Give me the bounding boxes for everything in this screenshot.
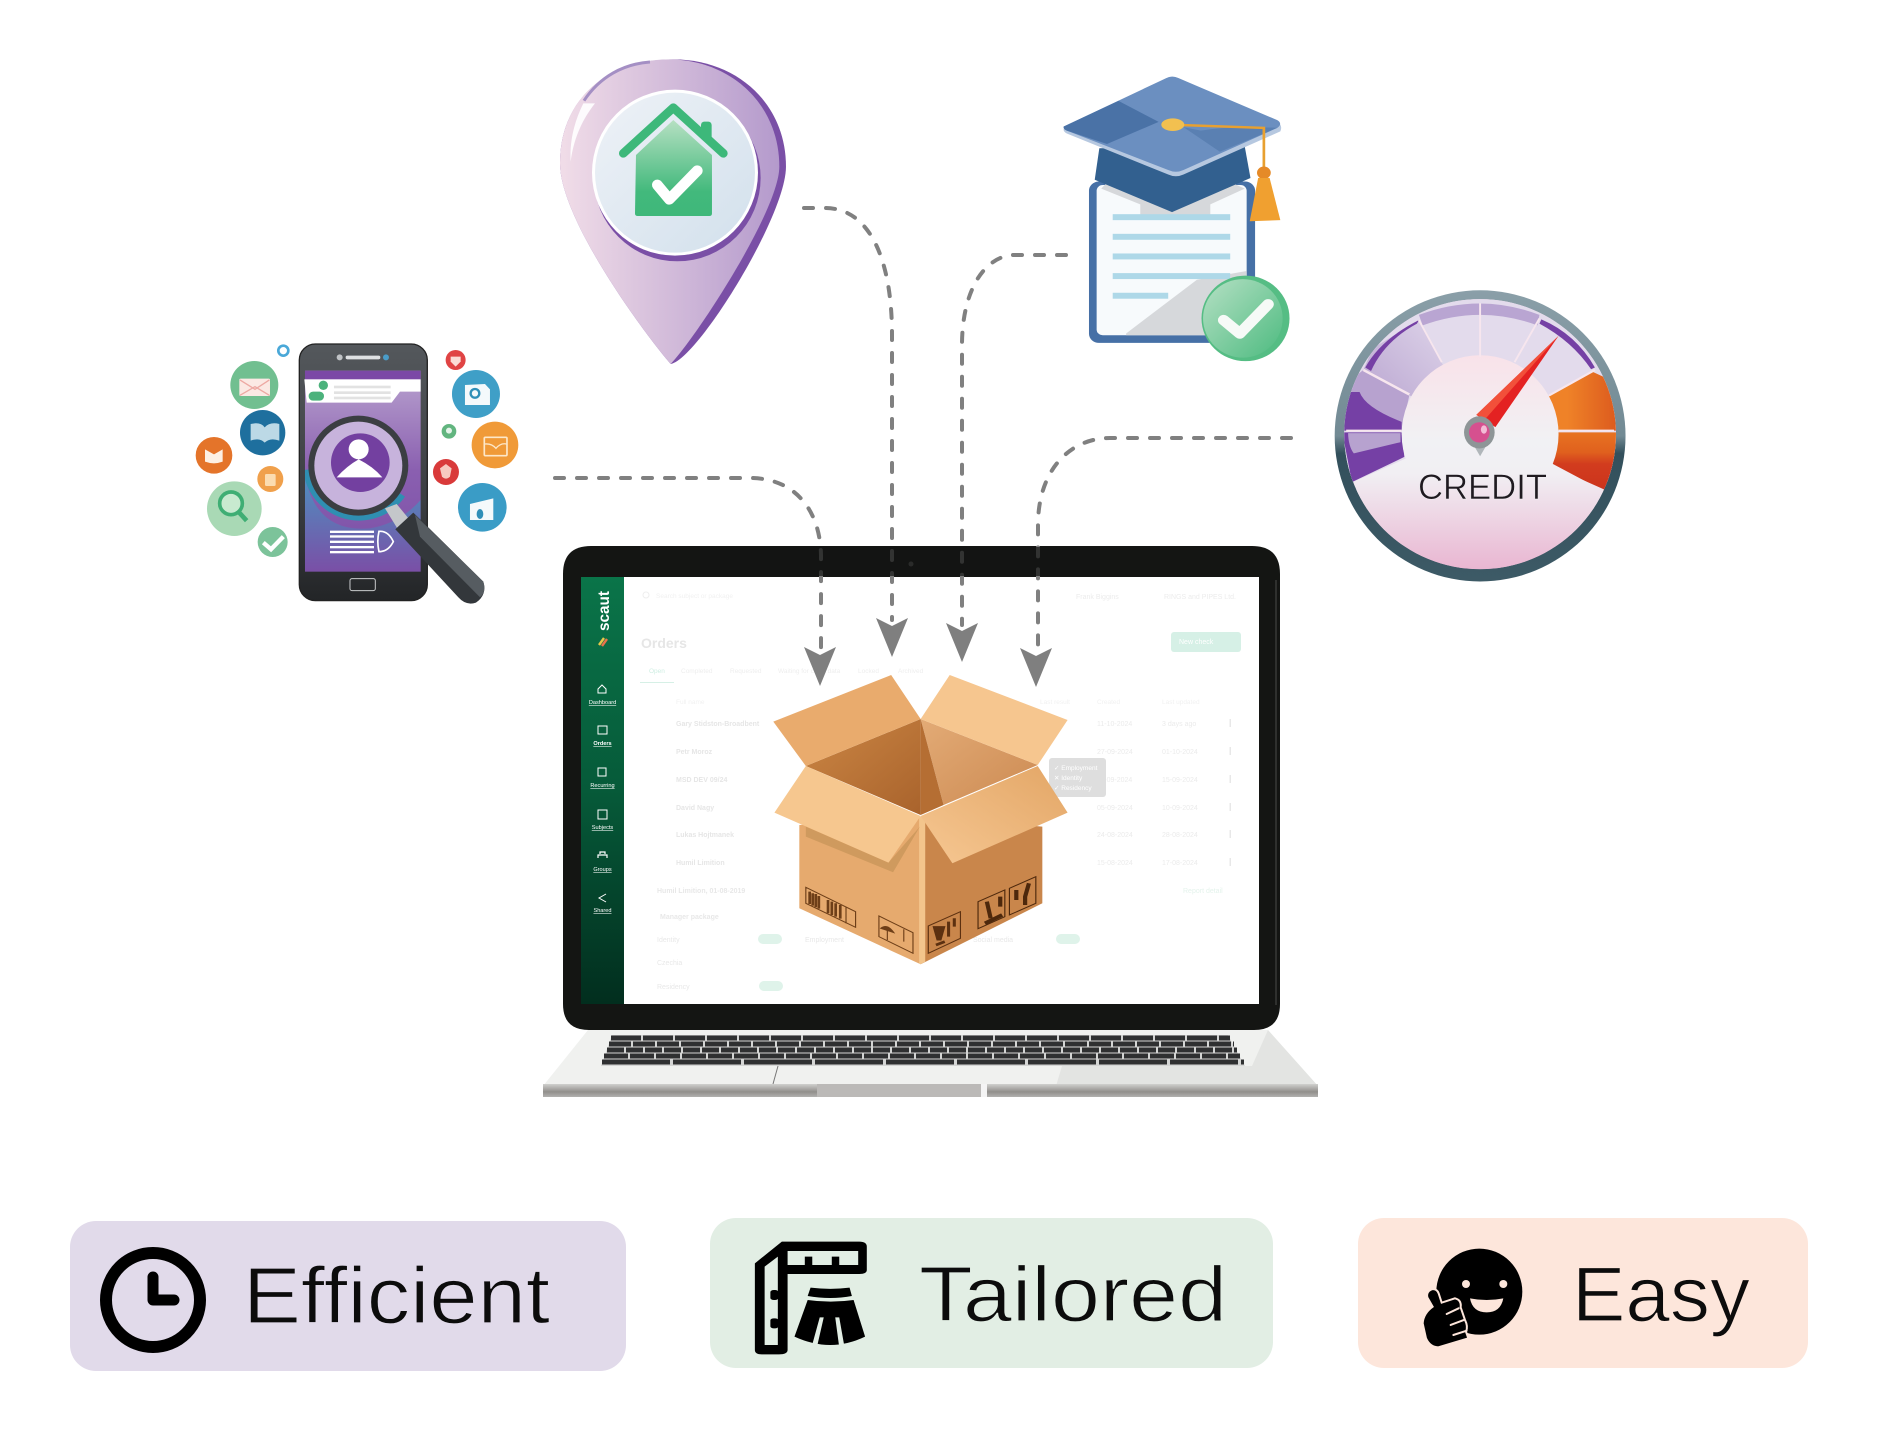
gauge sectors bbox=[1344, 299, 1616, 570]
box interior bbox=[806, 719, 1038, 815]
house check bbox=[657, 171, 697, 199]
tooltip: ✕ Identity bbox=[1054, 775, 1083, 782]
phone with app icons bbox=[196, 344, 518, 604]
paper fold grey bbox=[1101, 183, 1247, 335]
search field: Search subject or package bbox=[656, 593, 733, 600]
nav: groups bbox=[593, 852, 612, 873]
tab underline bbox=[640, 682, 674, 683]
house body bbox=[635, 120, 712, 216]
smiley face bbox=[1436, 1249, 1522, 1335]
gauge pivot bbox=[1464, 416, 1495, 456]
date columns: 11-09-2024 bbox=[1097, 777, 1132, 784]
row details: Employment bbox=[805, 937, 844, 944]
row details: Humil Limition, 01-08-2019 bbox=[657, 888, 745, 895]
date columns: 05-09-2024 bbox=[1097, 805, 1133, 812]
gauge needle bbox=[1476, 336, 1559, 427]
row menus bbox=[1230, 719, 1231, 866]
pin body bbox=[560, 59, 779, 364]
dashed arrows into box bbox=[555, 208, 1291, 687]
faded orders table on screen bbox=[640, 592, 1241, 991]
finger gaps bbox=[1447, 1308, 1467, 1335]
upper left purple fill bbox=[1342, 392, 1402, 431]
handling label: glass bbox=[928, 912, 960, 953]
laptop lid bbox=[563, 546, 1280, 1030]
status tabs: Requested bbox=[730, 668, 762, 675]
house roof bbox=[623, 108, 723, 153]
handling label: arrows bbox=[978, 890, 1005, 929]
date columns: 28-08-2024 bbox=[1162, 832, 1198, 839]
table header: Last updated bbox=[1162, 699, 1200, 706]
ruler notches bbox=[770, 1290, 778, 1328]
top bar account text: Frank Biggins bbox=[1076, 594, 1119, 601]
trackpad edge bbox=[773, 1066, 778, 1084]
camera bbox=[908, 562, 914, 566]
date columns: 27-09-2024 bbox=[1097, 749, 1133, 756]
chip: efficient bbox=[70, 1221, 626, 1371]
front left flap bbox=[774, 766, 921, 863]
app icon: small blue ring bbox=[278, 346, 288, 356]
table rows bbox=[676, 721, 760, 867]
app icon: blue camera bbox=[452, 370, 500, 418]
app sidebar bbox=[581, 577, 624, 1004]
bezel dim overlay for arrows bbox=[700, 547, 1100, 576]
nav: dashboard: Dashboard bbox=[589, 700, 616, 706]
date columns: 11-10-2024 bbox=[1097, 721, 1132, 728]
smiley features bbox=[1462, 1280, 1507, 1312]
gauge face bbox=[1344, 299, 1616, 569]
red sector bbox=[1552, 432, 1616, 491]
nav: groups: Groups bbox=[593, 867, 612, 873]
nav: shared bbox=[593, 894, 612, 914]
scaut logo: scaut bbox=[596, 590, 613, 631]
table header: Full name bbox=[676, 699, 705, 706]
handling label: umbrella bbox=[879, 916, 913, 953]
nav: shared: Shared bbox=[593, 908, 612, 914]
laptop screen bbox=[581, 577, 1259, 1004]
chip background bbox=[1358, 1218, 1808, 1368]
nav: subjects: Subjects bbox=[592, 825, 613, 831]
app icon: blue book bbox=[240, 410, 285, 455]
back flaps bbox=[773, 675, 1068, 766]
pin shadow edge bbox=[560, 59, 786, 364]
row details: Manager package bbox=[660, 914, 719, 921]
diploma paper bbox=[1097, 185, 1247, 335]
phone screen bbox=[305, 371, 421, 572]
status tabs: Open bbox=[649, 668, 665, 675]
chip background bbox=[70, 1221, 626, 1371]
date columns: 24-08-2024 bbox=[1097, 832, 1133, 839]
magnifier handle bbox=[385, 504, 484, 604]
top bar account text bbox=[1076, 594, 1236, 601]
lid edge highlight bbox=[1275, 580, 1277, 1005]
keyboard bbox=[601, 1035, 1245, 1066]
front right flap bbox=[921, 766, 1068, 863]
date columns: 10-09-2024 bbox=[1162, 805, 1198, 812]
table rows: MSD DEV 09/24 bbox=[676, 777, 727, 784]
app icon: orange lock bbox=[257, 466, 283, 492]
chip background bbox=[710, 1218, 1273, 1368]
app icon: red flame bbox=[433, 459, 459, 485]
label: Easy bbox=[1572, 1250, 1750, 1338]
row details: Residency bbox=[657, 984, 690, 991]
arrow from diploma bbox=[946, 255, 1066, 662]
upper left purple sector bbox=[1342, 370, 1409, 431]
row details: Czechia bbox=[657, 960, 682, 967]
gauge hub area bbox=[1402, 356, 1559, 464]
right purple rim bbox=[1539, 319, 1595, 369]
logo mark bbox=[599, 638, 607, 646]
date columns: 17-08-2024 bbox=[1162, 860, 1198, 867]
tassel bbox=[1161, 118, 1280, 221]
nav: orders bbox=[593, 726, 612, 747]
skirt body bbox=[794, 1300, 865, 1345]
label: Tailored bbox=[919, 1250, 1227, 1338]
card lines and green badges bbox=[309, 381, 391, 401]
cardboard box bbox=[773, 675, 1068, 964]
orders heading: Orders bbox=[641, 635, 687, 651]
app icon: orange mail bbox=[196, 437, 232, 474]
lower left lavender patch bbox=[1348, 433, 1401, 453]
phone speaker bbox=[337, 354, 389, 360]
row details: Social media bbox=[973, 937, 1013, 944]
barcode label bbox=[806, 887, 856, 927]
table header bbox=[676, 699, 1200, 706]
diploma cover bbox=[1089, 182, 1255, 343]
skirt pleats bbox=[812, 1317, 844, 1347]
status tabs: Locked bbox=[858, 668, 879, 675]
pin highlight bbox=[570, 103, 595, 162]
location pin with home bbox=[560, 59, 786, 364]
laptop base bbox=[543, 1030, 1318, 1097]
chip: easy bbox=[1358, 1218, 1808, 1368]
cap board bbox=[1064, 77, 1281, 176]
laptop bbox=[543, 546, 1318, 1097]
status tabs: Waiting for client data bbox=[778, 668, 841, 675]
label: Efficient bbox=[243, 1251, 550, 1340]
table rows: David Nagy bbox=[676, 805, 714, 812]
tooltip: ✓ Residency bbox=[1054, 785, 1092, 792]
lavender scale bbox=[1344, 299, 1616, 482]
magnifier lens with user bbox=[308, 416, 408, 516]
thumbs up hand bbox=[1423, 1289, 1468, 1347]
icon: thumbs up smiley bbox=[1423, 1249, 1522, 1347]
table header: Created bbox=[1097, 699, 1121, 706]
tooltip bbox=[1049, 758, 1106, 797]
front strip bbox=[543, 1084, 1318, 1097]
lower face mask bbox=[1356, 479, 1604, 570]
new check button: New check bbox=[1179, 639, 1214, 646]
row details: Report detail bbox=[1183, 888, 1223, 895]
credit gauge dial bbox=[1335, 278, 1626, 581]
icon: ruler and skirt bbox=[755, 1242, 867, 1354]
home button bbox=[350, 579, 375, 591]
row details bbox=[657, 888, 1223, 991]
date columns: 15-09-2024 bbox=[1162, 777, 1198, 784]
cap base bbox=[1095, 146, 1250, 212]
skirt waist bbox=[808, 1288, 852, 1298]
check badge bbox=[1201, 276, 1290, 361]
nav: subjects bbox=[592, 810, 613, 831]
lower left purple sector bbox=[1342, 432, 1404, 482]
screen text lines bbox=[330, 531, 393, 553]
icon: clock bbox=[106, 1253, 200, 1347]
date columns: 15-08-2024 bbox=[1097, 860, 1133, 867]
top lavender band bbox=[1419, 303, 1539, 325]
tooltip: ✓ Employment bbox=[1054, 765, 1098, 772]
pin circle shadow bbox=[594, 95, 761, 261]
app icon: small green dot bbox=[442, 424, 456, 439]
gauge label: CREDIT bbox=[1418, 468, 1547, 507]
nav: recurring: Recurring bbox=[590, 783, 615, 789]
row details: Identity bbox=[657, 937, 680, 944]
left purple rim bbox=[1365, 320, 1419, 371]
date columns: 3 days ago bbox=[1162, 721, 1196, 728]
table rows: Petr Moroz bbox=[676, 749, 713, 756]
status tabs bbox=[649, 668, 924, 675]
sidebar navigation bbox=[589, 685, 616, 914]
box corner edge bbox=[919, 817, 925, 964]
palm rest shading bbox=[1056, 1030, 1318, 1086]
nav: recurring bbox=[590, 768, 615, 789]
nav: orders: Orders bbox=[593, 741, 612, 747]
new check button bbox=[1171, 632, 1241, 652]
app icon: blue folder bbox=[458, 483, 507, 532]
status tabs: Archived bbox=[898, 668, 924, 675]
top bar account text: RINGS and PIPES Ltd. bbox=[1164, 594, 1236, 601]
table rows: Humil Limition bbox=[676, 860, 725, 867]
gauge bezel bbox=[1335, 290, 1626, 581]
table header: Last result bbox=[1040, 699, 1070, 706]
app icon: small red heart bbox=[446, 350, 466, 370]
app icon: green envelope bbox=[230, 361, 278, 409]
app icon: orange picture bbox=[472, 422, 518, 468]
arrow from pin bbox=[804, 208, 908, 657]
date columns: 01-10-2024 bbox=[1162, 749, 1198, 756]
graduation cap and diploma bbox=[1064, 77, 1290, 361]
pin top-left rim bbox=[584, 62, 650, 101]
screen header band bbox=[305, 371, 421, 379]
phone body bbox=[299, 344, 427, 601]
box right face bbox=[921, 817, 1042, 964]
box left face bbox=[799, 817, 921, 964]
orange sector bbox=[1548, 372, 1616, 431]
status tabs: Completed bbox=[681, 668, 713, 675]
app icon: green check bbox=[258, 527, 288, 557]
flap shadows bbox=[806, 827, 920, 872]
screen white card bbox=[304, 379, 421, 403]
handling label: fragile bbox=[1009, 877, 1036, 915]
screen lower panel bbox=[305, 470, 420, 558]
ruler bbox=[755, 1242, 867, 1354]
gauge ticks bbox=[1346, 303, 1614, 431]
app icon: green magnifier bbox=[207, 481, 262, 536]
date columns bbox=[1097, 721, 1198, 867]
diploma text lines bbox=[1113, 214, 1230, 299]
table rows: Gary Stidston-Broadbent bbox=[676, 721, 760, 728]
status pills bbox=[758, 934, 1080, 991]
pin circle bbox=[592, 90, 758, 256]
arrow from gauge bbox=[1020, 438, 1291, 687]
nav: dashboard bbox=[589, 685, 616, 706]
left lavender sector bbox=[1364, 322, 1443, 396]
chip: tailored bbox=[710, 1218, 1273, 1368]
table rows: Lukas Hojtmanek bbox=[676, 832, 734, 839]
arrow from phone bbox=[555, 478, 836, 686]
